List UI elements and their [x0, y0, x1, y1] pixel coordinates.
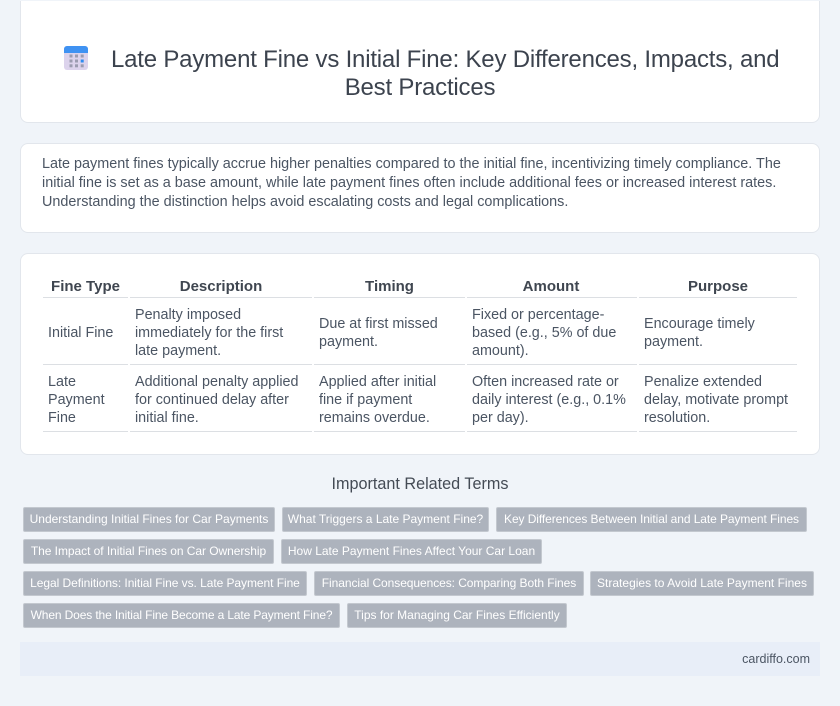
row: late payment fine: Often increased rate or — [472, 374, 619, 390]
row: late payment fine: resolution. — [644, 410, 710, 426]
tag — [282, 507, 489, 532]
tag — [23, 571, 307, 596]
tag — [23, 539, 274, 564]
title: Late Payment Fine vs Initial Fine: Key Differences, Impacts, and — [111, 46, 779, 73]
tag: Tips for Managing Car Fines Efficiently — [354, 608, 560, 622]
intro paragraph: Understanding the distinction helps avoid escalating costs and legal complications. — [42, 194, 568, 210]
table header row: Fine Type — [51, 278, 120, 295]
row: initial fine: payment. — [319, 334, 378, 350]
tag — [590, 571, 814, 596]
comparison table panel — [20, 253, 820, 455]
row: initial fine: late payment. — [135, 343, 221, 359]
table header row: Timing — [365, 278, 414, 295]
row: initial fine: based (e.g., 5% of due — [472, 325, 616, 341]
tag — [281, 539, 542, 564]
row: initial fine: payment. — [644, 334, 703, 350]
tag: Financial Consequences: Comparing Both Fines — [322, 576, 576, 590]
intro paragraph: Late payment fines typically accrue higher penalties compared to the initial fine, incentivizing timely compliance. The — [42, 156, 781, 172]
row: late payment fine: Penalize extended — [644, 374, 762, 390]
footer bar — [20, 642, 820, 676]
row: late payment fine: initial fine. — [135, 410, 199, 426]
row: late payment fine: delay, motivate prompt — [644, 392, 788, 408]
icon: calendar — [64, 46, 88, 70]
row: late payment fine: fine if payment — [319, 392, 412, 408]
tag: Legal Definitions: Initial Fine vs. Late Payment Fine — [30, 576, 300, 590]
table header row: Amount — [523, 278, 579, 295]
row: late payment fine: per day). — [472, 410, 529, 426]
intro paragraph panel — [20, 143, 820, 233]
tag: When Does the Initial Fine Become a Late Payment Fine? — [31, 608, 332, 622]
related terms tags — [23, 507, 814, 628]
related terms heading: Important Related Terms — [332, 475, 508, 493]
row: initial fine: Fixed or percentage- — [472, 307, 604, 323]
row: late payment fine: Additional penalty applied — [135, 374, 298, 390]
intro paragraph — [42, 156, 781, 210]
row: initial fine: Penalty imposed — [135, 307, 241, 323]
row: late payment fine: Payment — [48, 392, 105, 408]
row: late payment fine: Late — [48, 374, 76, 390]
row: late payment fine — [48, 374, 788, 426]
tag: How Late Payment Fines Affect Your Car Loan — [288, 544, 535, 558]
footer source: cardiffo.com — [742, 652, 810, 666]
tag — [314, 571, 584, 596]
title: Best Practices — [345, 74, 495, 101]
tag: Strategies to Avoid Late Payment Fines — [597, 576, 807, 590]
title — [111, 46, 779, 101]
row: initial fine: Initial Fine — [48, 325, 113, 341]
tag: Understanding Initial Fines for Car Payments — [30, 512, 268, 526]
table header row: Description — [180, 278, 262, 295]
tag: What Triggers a Late Payment Fine? — [288, 512, 483, 526]
row: initial fine: immediately for the first — [135, 325, 283, 341]
row: initial fine — [48, 307, 755, 359]
table header row — [51, 278, 748, 295]
row: late payment fine: Applied after initial — [319, 374, 436, 390]
tag — [23, 603, 340, 628]
tag — [23, 507, 275, 532]
tag: The Impact of Initial Fines on Car Ownership — [31, 544, 266, 558]
row: late payment fine: remains overdue. — [319, 410, 430, 426]
table header row: Purpose — [688, 278, 748, 295]
row: late payment fine: daily interest (e.g., 0.1% — [472, 392, 626, 408]
intro paragraph: initial fine is set as a base amount, while late payment fines often include additional fees or increased interest rates. — [42, 175, 776, 191]
tag — [347, 603, 567, 628]
row: late payment fine: for continued delay after — [135, 392, 289, 408]
tag: Key Differences Between Initial and Late Payment Fines — [504, 512, 799, 526]
row: late payment fine: Fine — [48, 410, 76, 426]
row: initial fine: amount). — [472, 343, 529, 359]
row: initial fine: Encourage timely — [644, 316, 755, 332]
row: initial fine: Due at first missed — [319, 316, 438, 332]
header panel — [20, 1, 820, 123]
tag — [496, 507, 807, 532]
